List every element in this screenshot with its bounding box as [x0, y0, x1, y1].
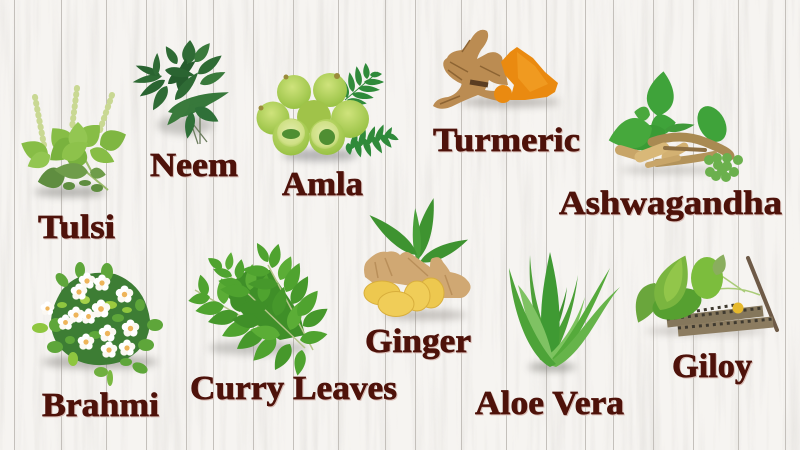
- icon: tulsi plant: [17, 88, 130, 197]
- panel: neem: [132, 40, 238, 184]
- label: Aloe Vera: Aloe Vera: [475, 385, 624, 422]
- label: Curry Leaves: Curry Leaves: [190, 370, 397, 407]
- icon: amla fruits and leaves: [256, 63, 400, 161]
- icon: turmeric root and powder: [433, 30, 560, 109]
- panel: aloe vera: [475, 252, 624, 422]
- icon: giloy stems and leaves: [628, 249, 777, 335]
- label: Neem: Neem: [150, 147, 238, 184]
- panel: giloy: [628, 249, 777, 385]
- label: Turmeric: Turmeric: [433, 122, 580, 159]
- panel: ashwagandha: [559, 70, 782, 222]
- icon: brahmi bush with white flowers: [32, 262, 163, 386]
- label: Ashwagandha: Ashwagandha: [559, 185, 782, 222]
- label: Amla: Amla: [282, 166, 363, 203]
- icon: curry leaf branches: [187, 241, 331, 377]
- label: Tulsi: Tulsi: [38, 209, 115, 246]
- label: Giloy: Giloy: [672, 348, 752, 385]
- icon: ashwagandha leaves, roots and berries: [605, 70, 743, 182]
- label: Brahmi: Brahmi: [42, 387, 159, 424]
- panel: curry leaves: [187, 241, 397, 407]
- panel: tulsi: [17, 88, 130, 246]
- panel: amla: [256, 63, 400, 203]
- panel: ginger: [364, 196, 471, 360]
- icon: ginger root, slices and leaves: [364, 196, 471, 320]
- panel: brahmi: [32, 262, 163, 424]
- icon: neem leaves: [132, 40, 231, 144]
- icon: aloe vera plant: [509, 252, 620, 371]
- label: Ginger: Ginger: [365, 323, 471, 360]
- panel: turmeric: [433, 30, 580, 159]
